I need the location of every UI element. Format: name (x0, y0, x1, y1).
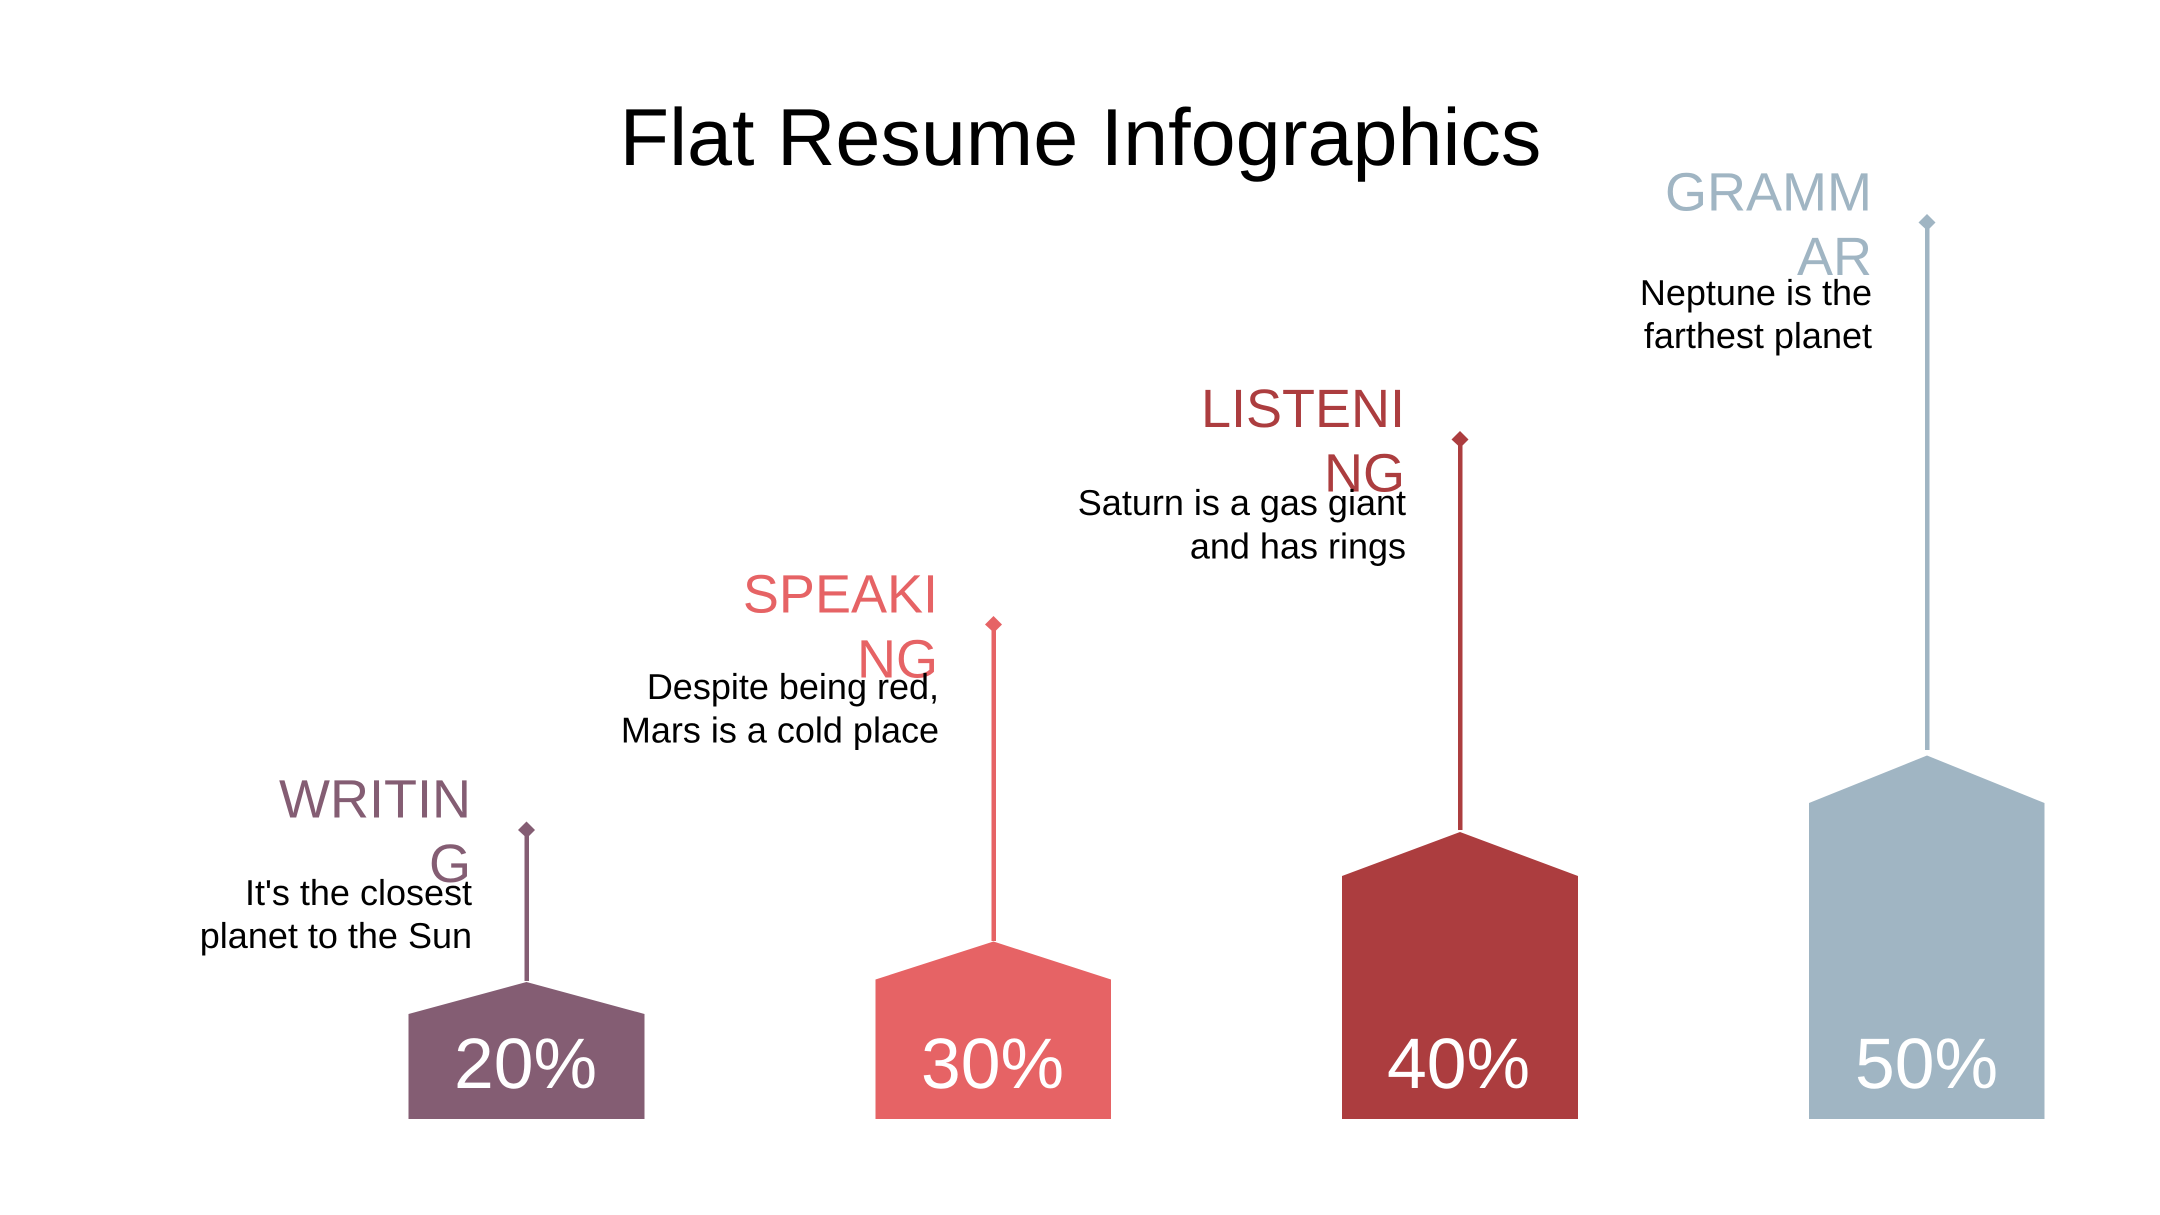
panel: listening 40% (1078, 379, 1578, 1119)
text block: grammar description: Neptune is the (1640, 272, 1872, 313)
heading: speaking: NG (857, 630, 938, 690)
text block: listening description: and has rings (1190, 526, 1406, 566)
panel: writing 20% (200, 770, 644, 1119)
value: 30%: 30% (921, 1024, 1064, 1104)
title: Flat Resume Infographics (620, 93, 1541, 183)
bar: listening (1342, 832, 1578, 1119)
heading: grammar: GRAMM (1665, 162, 1872, 222)
heading: writing: WRITIN (279, 770, 471, 830)
heading: speaking: SPEAKI (743, 564, 938, 624)
icon: grammar pointer line (1918, 214, 1936, 750)
value: 40%: 40% (1387, 1024, 1530, 1104)
heading: grammar: AR (1797, 227, 1872, 287)
bar: speaking (876, 942, 1111, 1119)
value: 50%: 50% (1855, 1024, 1998, 1104)
text block: speaking description: Despite being red, (647, 666, 939, 707)
text block: speaking description: Mars is a cold place (621, 710, 939, 750)
heading: writing: G (429, 834, 471, 894)
text block: grammar description: farthest planet (1644, 315, 1872, 356)
icon: speaking pointer line (985, 616, 1002, 941)
panel: speaking 30% (621, 564, 1111, 1119)
text block: writing description: planet to the Sun (200, 915, 472, 956)
text block: writing description: It's the closest (245, 872, 472, 913)
icon: writing pointer line (518, 822, 535, 981)
icon: listening pointer line (1452, 431, 1468, 830)
bar: grammar (1809, 756, 2044, 1119)
panel: grammar 50% (1640, 162, 2044, 1119)
value: 20%: 20% (454, 1024, 597, 1104)
text block: listening description: Saturn is a gas giant (1078, 482, 1406, 523)
heading: listening: NG (1324, 444, 1405, 504)
heading: listening: LISTENI (1201, 379, 1405, 439)
bar: writing (408, 982, 644, 1119)
